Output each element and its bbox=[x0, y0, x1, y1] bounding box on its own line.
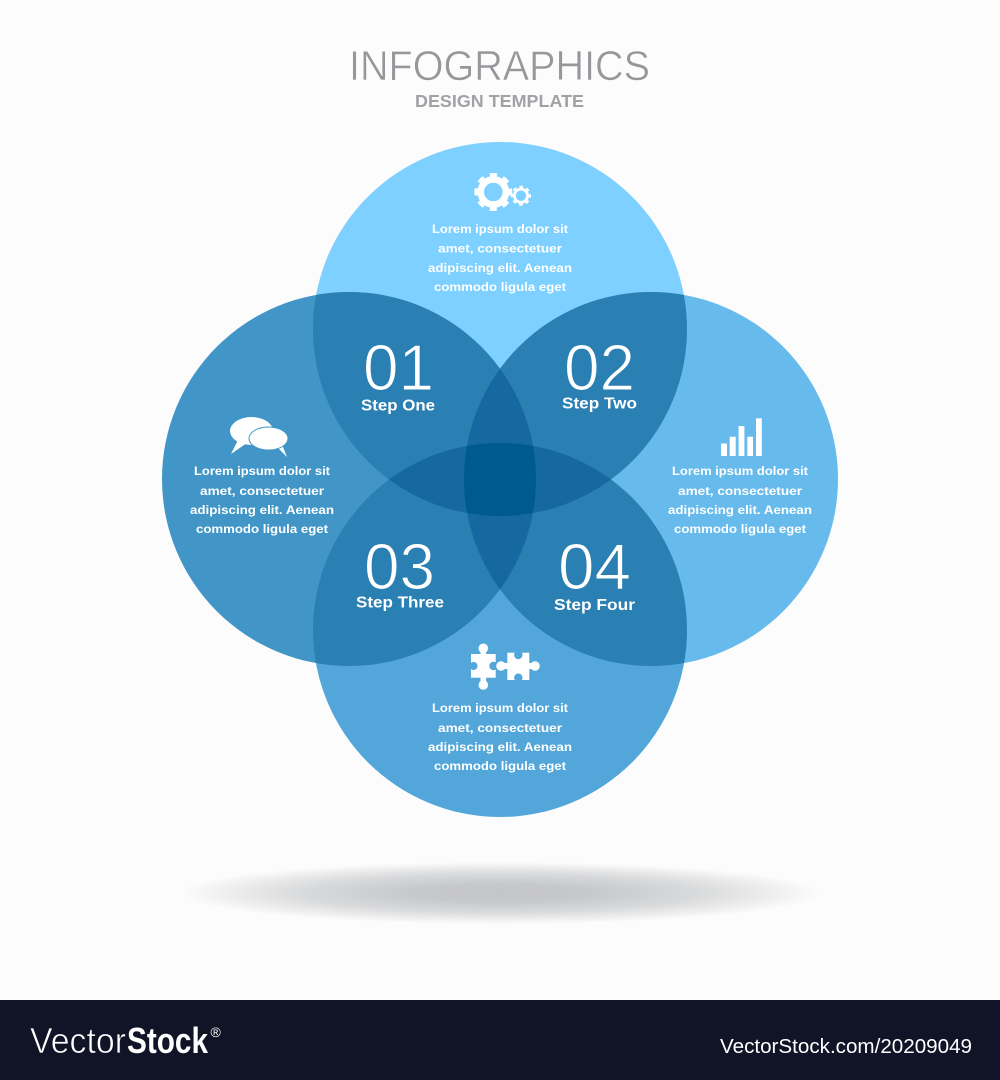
title: INFOGRAPHICS bbox=[349, 42, 650, 89]
text block: top circle bbox=[428, 222, 572, 294]
step three label: Step Three bbox=[356, 594, 444, 612]
text block: right circle: Lorem ipsum dolor sit bbox=[672, 464, 808, 478]
circle: bottom bbox=[313, 443, 687, 817]
text block: left circle: Lorem ipsum dolor sit bbox=[194, 464, 330, 478]
footer logo: Vector: Vector bbox=[30, 1020, 126, 1061]
icon: bar chart bbox=[721, 418, 762, 456]
footer image id: VectorStock.com/20209049 bbox=[720, 1036, 972, 1058]
footer bar bbox=[0, 1000, 1000, 1080]
overlap: step one bbox=[313, 292, 500, 480]
circle: right bbox=[464, 292, 838, 666]
text block: top circle: Lorem ipsum dolor sit bbox=[432, 222, 568, 236]
ground shadow bbox=[180, 862, 820, 924]
icon: puzzle pieces bbox=[470, 644, 540, 690]
text block: bottom circle: amet, consectetuer bbox=[438, 721, 562, 735]
centre overlap bbox=[464, 443, 536, 516]
lens: left and right bbox=[467, 369, 533, 589]
overlap: step two bbox=[500, 292, 687, 480]
step one label: Step One bbox=[361, 398, 435, 414]
text block: right circle: amet, consectetuer bbox=[678, 484, 802, 498]
step three label: 03 bbox=[364, 530, 435, 603]
text block: right circle bbox=[668, 464, 812, 536]
title bbox=[349, 42, 650, 111]
text block: left circle: amet, consectetuer bbox=[200, 484, 324, 498]
circle: top bbox=[313, 142, 687, 516]
text block: top circle: amet, consectetuer bbox=[438, 242, 562, 256]
footer logo: Stock: Stock bbox=[127, 1020, 209, 1061]
text block: right circle: commodo ligula eget bbox=[674, 522, 806, 536]
text block: bottom circle: commodo ligula eget bbox=[434, 759, 566, 773]
icon: speech bubbles bbox=[230, 417, 288, 457]
text block: top circle: adipiscing elit. Aenean bbox=[428, 261, 572, 275]
overlap: step three bbox=[313, 480, 500, 666]
lens: top and bottom bbox=[390, 446, 610, 513]
text block: bottom circle: adipiscing elit. Aenean bbox=[428, 740, 572, 754]
subtitle: DESIGN TEMPLATE bbox=[415, 91, 584, 111]
icon: gears bbox=[476, 175, 530, 209]
step two label: 02 bbox=[564, 331, 635, 404]
step two label: Step Two bbox=[562, 396, 637, 412]
step four label: Step Four bbox=[554, 597, 635, 614]
text block: bottom circle: Lorem ipsum dolor sit bbox=[432, 701, 568, 715]
step one label: 01 bbox=[363, 331, 434, 404]
step four label: 04 bbox=[558, 530, 631, 603]
circle: left bbox=[162, 292, 536, 666]
text block: right circle: adipiscing elit. Aenean bbox=[668, 503, 812, 517]
venn diagram: four overlapping circles bbox=[162, 142, 838, 817]
text block: left circle bbox=[190, 464, 334, 536]
registered mark: ® bbox=[210, 1024, 222, 1040]
text block: bottom circle bbox=[428, 701, 572, 773]
overlap: step four bbox=[500, 480, 687, 666]
text block: left circle: commodo ligula eget bbox=[196, 522, 328, 536]
text block: top circle: commodo ligula eget bbox=[434, 280, 566, 294]
text block: left circle: adipiscing elit. Aenean bbox=[190, 503, 334, 517]
